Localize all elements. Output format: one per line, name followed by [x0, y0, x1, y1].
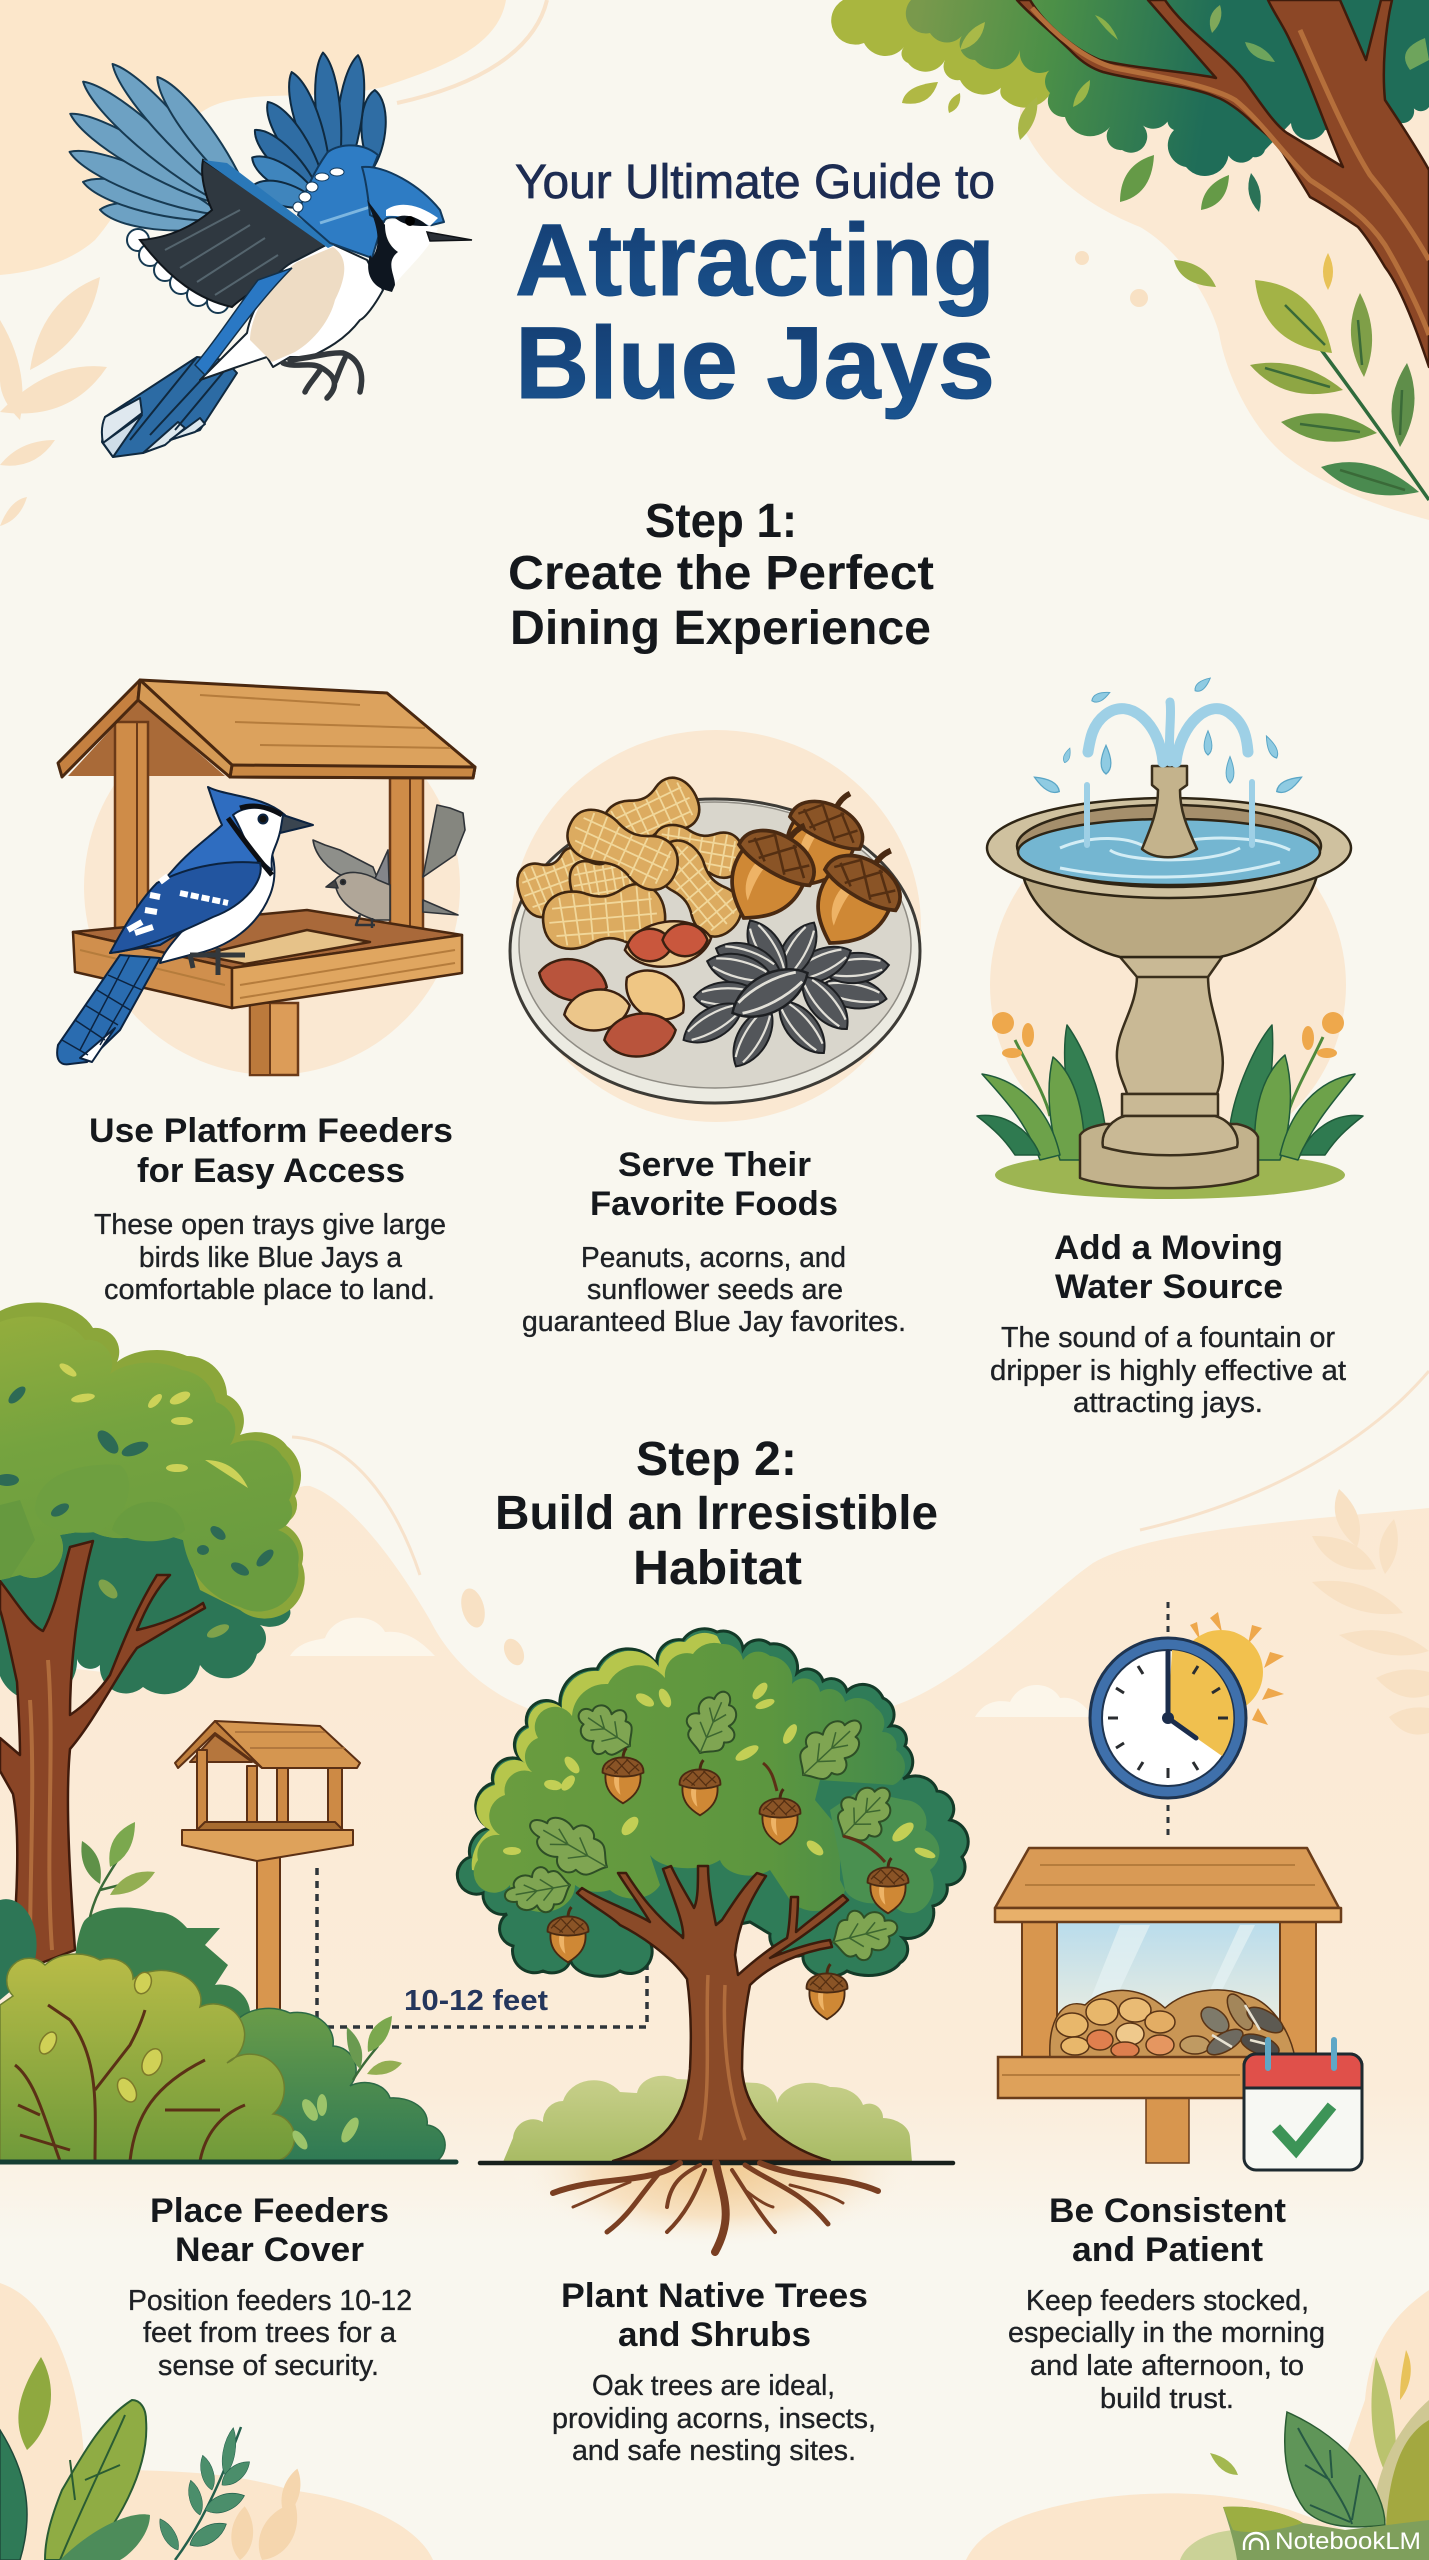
- sunflower seeds: [676, 913, 890, 1074]
- roof: [995, 1848, 1341, 1922]
- canopy leaves: [960, 5, 1429, 107]
- dotted connector: [1166, 1602, 1170, 1838]
- yellow leaves: [58, 1361, 248, 1488]
- text: favorite foods: Favorite Foods: [590, 1185, 838, 1223]
- NotebookLM badge: NotebookLM: [1275, 2528, 1421, 2555]
- small sprig: [290, 2016, 402, 2152]
- fern sprig: [155, 2427, 254, 2560]
- trunk and branches: [577, 1866, 848, 2161]
- shrub twigs: [15, 2005, 245, 2161]
- sun: [1179, 1612, 1284, 1725]
- text: native trees: and safe nesting sites.: [572, 2435, 856, 2467]
- text: native trees: Oak trees are ideal,: [592, 2370, 835, 2402]
- title: [515, 156, 995, 420]
- trunk: [0, 1541, 205, 1975]
- shrub leaves: [36, 1970, 166, 2105]
- heading: step 2: Build an Irresistible: [495, 1487, 938, 1540]
- canopy base: [457, 1629, 968, 1977]
- panel: platform feeder: [57, 680, 475, 1075]
- text: feeders near cover: Place Feeders: [150, 2192, 389, 2230]
- pedestal and base: [1080, 957, 1258, 1188]
- bottom right foliage: [1180, 2350, 1429, 2560]
- canopy main green: [474, 1643, 905, 1912]
- text: favorite foods: guaranteed Blue Jay favorites.: [522, 1306, 906, 1338]
- backdrop circle: [990, 807, 1346, 1163]
- head: [362, 167, 444, 228]
- back shrubs: [0, 1899, 37, 2000]
- feeder uprights: [115, 722, 423, 940]
- body: [200, 243, 383, 380]
- feeder post: [1146, 2098, 1189, 2163]
- acorns: [708, 775, 920, 963]
- feet: [283, 353, 362, 398]
- text: feeders near cover: [128, 2192, 412, 2382]
- shoulder: [298, 145, 385, 258]
- heading: step 1: Step 1:: [645, 495, 797, 548]
- food pile: [1050, 1990, 1295, 2060]
- feeder post: [250, 1003, 298, 1075]
- text: platform feeders: [89, 1112, 453, 1306]
- text: moving water: Add a Moving: [1054, 1229, 1283, 1267]
- water drops: [1032, 675, 1304, 796]
- fountain column: [1142, 766, 1197, 857]
- heading: step 1: Create the Perfect: [508, 547, 934, 600]
- text: platform feeders: Use Platform Feeders: [89, 1112, 453, 1150]
- panel: plate of foods: [510, 730, 921, 1122]
- heading: step 2: [495, 1433, 938, 1595]
- flowers: [992, 1012, 1344, 1116]
- oak leaves: [501, 1682, 906, 1967]
- back bush: [503, 2076, 912, 2162]
- water spray: [1087, 702, 1252, 845]
- text: consistent and patient: Keep feeders stocked,: [1026, 2285, 1309, 2317]
- hero blue jay: [64, 51, 472, 457]
- acorn stems: [763, 1763, 885, 1862]
- platform tray: [73, 910, 462, 1008]
- shelled and loose nuts: [535, 916, 714, 1061]
- text: moving water: The sound of a fountain or: [1001, 1322, 1335, 1354]
- heading: step 1: [508, 495, 934, 655]
- panel: left tree and feeder near cover: [0, 1302, 647, 2162]
- small feeder: [175, 1721, 360, 2030]
- text: consistent and patient: [1008, 2192, 1325, 2415]
- right lobe: [830, 1790, 939, 1913]
- small grey bird: [313, 805, 465, 928]
- distance line: [317, 1868, 647, 2027]
- white scalloped wing tips: [127, 229, 229, 313]
- canopy lime rim: [472, 1633, 740, 1880]
- ground line: [0, 2160, 456, 2164]
- ground line: [480, 2161, 953, 2165]
- panel: clock, sun and stocked feeder: [995, 1602, 1362, 2170]
- title: Your Ultimate Guide to: [515, 156, 995, 209]
- small plant: [81, 1822, 155, 1917]
- text: platform feeders: These open trays give large: [94, 1209, 446, 1241]
- acorns: [548, 1748, 908, 2019]
- text: feeders near cover: Position feeders 10-12: [128, 2285, 412, 2317]
- text: moving water: [990, 1229, 1346, 1419]
- text: platform feeders: for Easy Access: [137, 1152, 405, 1190]
- text: favorite foods: sunflower seeds are: [587, 1274, 843, 1306]
- canopy main: [0, 1317, 299, 1612]
- light leaves: [503, 1680, 937, 1861]
- roots: [553, 2163, 878, 2252]
- text: favorite foods: Serve Their: [618, 1146, 811, 1184]
- clock: [1090, 1638, 1246, 1798]
- text: moving water: attracting jays.: [1073, 1387, 1263, 1419]
- grass blades: [977, 1025, 1363, 1160]
- backdrop circle: [84, 699, 460, 1075]
- dark leaves: [0, 1384, 276, 1578]
- front olive shrub: [0, 1954, 295, 2161]
- distance label: 10-12 feet: [404, 1985, 548, 2017]
- lower wing fan: [64, 56, 260, 238]
- text: moving water: Water Source: [1055, 1268, 1283, 1306]
- text: consistent and patient: and Patient: [1072, 2231, 1263, 2269]
- tree: top right corner: [831, 0, 1429, 500]
- calendar: [1244, 2040, 1362, 2170]
- pale background leaves: [0, 251, 1429, 1735]
- heading: step 2: Step 2:: [636, 1433, 797, 1486]
- text: consistent and patient: and late afternoon, to: [1030, 2350, 1304, 2382]
- text: native trees: Plant Native Trees: [561, 2277, 868, 2315]
- plate: [510, 799, 920, 1103]
- heading: step 2: Habitat: [633, 1542, 802, 1595]
- upper wing: [246, 51, 387, 216]
- text: consistent and patient: Be Consistent: [1049, 2192, 1286, 2230]
- text: native trees: providing acorns, insects,: [552, 2403, 876, 2435]
- grass mound: [995, 1151, 1345, 1199]
- basin: [987, 798, 1351, 957]
- title: Blue Jays: [515, 306, 995, 420]
- glass hopper: [1057, 1922, 1280, 2042]
- text: feeders near cover: sense of security.: [158, 2350, 379, 2382]
- title: Attracting: [515, 203, 995, 317]
- text: feeders near cover: feet from trees for a: [143, 2317, 397, 2349]
- tray: [998, 2057, 1320, 2098]
- panel: bird bath: [977, 675, 1363, 1199]
- heading: step 1: Dining Experience: [510, 602, 931, 655]
- gable wall: [68, 700, 225, 776]
- roof: [58, 680, 475, 778]
- text: native trees: and Shrubs: [618, 2316, 811, 2354]
- text: native trees: [552, 2277, 876, 2467]
- leafy sprig: [1250, 280, 1429, 500]
- canopy lobes: [0, 1465, 185, 1580]
- text: consistent and patient: especially in the morning: [1008, 2317, 1325, 2349]
- text: platform feeders: comfortable place to land.: [104, 1274, 435, 1306]
- trunk and branches: [1017, 0, 1429, 367]
- text: moving water: dripper is highly effective at: [990, 1355, 1346, 1387]
- text: favorite foods: [522, 1146, 906, 1338]
- text: feeders near cover: Near Cover: [175, 2231, 364, 2269]
- hanging leaves: [902, 82, 1333, 290]
- text: favorite foods: Peanuts, acorns, and: [581, 1242, 846, 1274]
- text: consistent and patient: build trust.: [1100, 2383, 1234, 2415]
- text: platform feeders: birds like Blue Jays a: [139, 1242, 403, 1274]
- beak: [427, 232, 472, 241]
- canopy leaves in shade: [95, 1576, 231, 1641]
- backdrop circle: [511, 730, 921, 1122]
- blue jay on tray: [57, 787, 313, 1064]
- root glow: [510, 2088, 920, 2248]
- canopy olive rim: [0, 1302, 305, 1619]
- uprights: [1022, 1920, 1316, 2060]
- bottom left foliage: [0, 2357, 309, 2560]
- canopy dark underside: [0, 1500, 290, 1701]
- dark wing: [140, 160, 330, 307]
- tail: [102, 357, 237, 457]
- right shrub: [229, 2008, 445, 2161]
- peanuts: [511, 770, 751, 953]
- panel: oak tree: [457, 1629, 968, 2252]
- clouds: [290, 1618, 1093, 1717]
